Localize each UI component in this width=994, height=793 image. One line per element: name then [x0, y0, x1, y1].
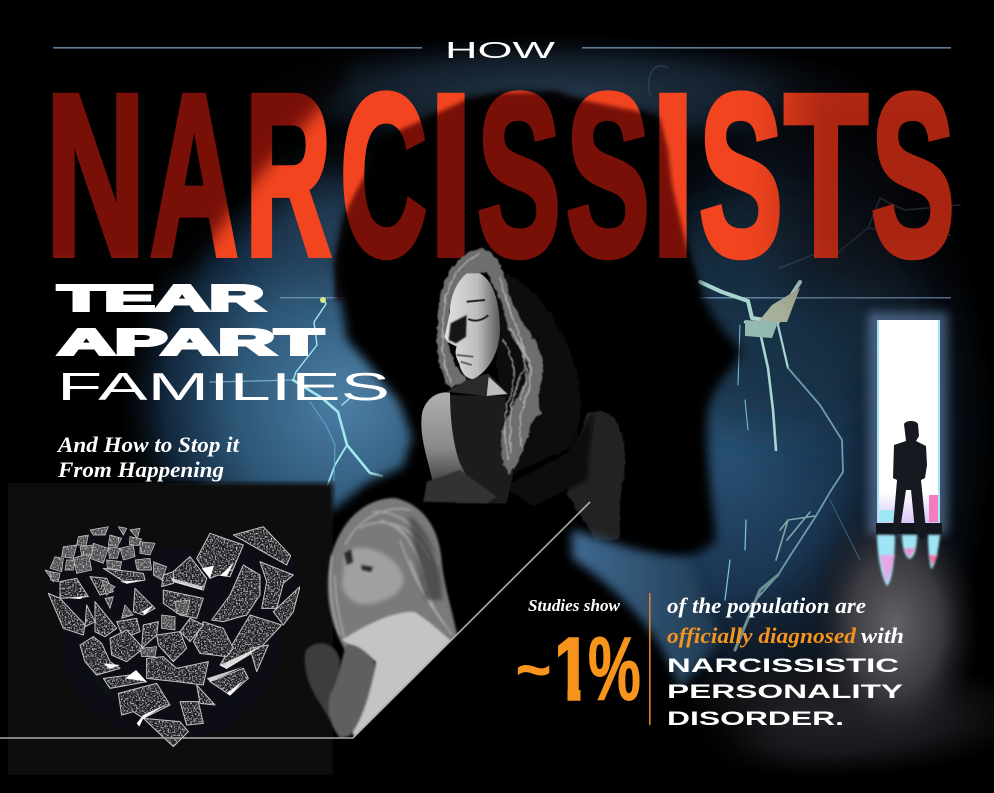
- heading: TEAR APART FAMILIES: APART: [58, 322, 323, 362]
- heading: TEAR APART FAMILIES: [57, 278, 390, 409]
- heart base: [47, 527, 300, 747]
- bottom edge of wall: [690, 776, 994, 793]
- statement text: NARCISSISTIC: [667, 655, 899, 677]
- photo: child: [305, 498, 460, 738]
- panel: title word NARCISSISTS: [46, 46, 955, 304]
- dark top: [443, 394, 513, 503]
- statement text: [667, 593, 904, 730]
- neck: [447, 373, 508, 396]
- floor reflections: [877, 535, 940, 586]
- bright glints: [69, 562, 263, 727]
- statistic: studies show about 1%: 1: [552, 619, 592, 720]
- head silhouette shadow: [0, 92, 742, 793]
- dark back hair: [487, 267, 581, 473]
- hair strands: [443, 253, 531, 460]
- lit hair: [437, 247, 543, 475]
- statement text: DISORDER.: [667, 708, 844, 730]
- subtitle: And How to Stop it: [56, 432, 240, 457]
- forearm: [423, 470, 497, 503]
- statistic: studies show about 1%: %: [588, 620, 641, 720]
- door with silhouette man: [868, 312, 948, 586]
- photo: woman: [421, 247, 625, 540]
- face: [445, 273, 500, 379]
- child's hand: [305, 643, 340, 720]
- panel: title word NARCISSISTS: S: [566, 47, 650, 304]
- panel: title word NARCISSISTS: S: [477, 47, 561, 304]
- statement text: PERSONALITY: [667, 681, 903, 703]
- heading: TEAR APART FAMILIES: FAMILIES: [57, 366, 390, 409]
- statement text: officially diagnosed: [667, 623, 857, 648]
- orange divider: [649, 593, 651, 725]
- panel: title word NARCISSISTS: N: [46, 47, 145, 304]
- right arm: [567, 411, 625, 540]
- panel: title word NARCISSISTS: T: [784, 48, 868, 304]
- statement text: with: [861, 623, 904, 648]
- door of light: [877, 320, 940, 523]
- panel: title word NARCISSISTS: A: [150, 47, 238, 304]
- gray floor glow under the door: [810, 500, 980, 750]
- child's shirt: [342, 612, 460, 738]
- subtitle: [56, 432, 240, 482]
- panel: title word NARCISSISTS: S: [871, 47, 955, 304]
- panel: title word NARCISSISTS: C: [340, 47, 427, 303]
- heart of broken glass: [45, 527, 300, 747]
- panel: title word NARCISSISTS: R: [245, 46, 331, 303]
- heart panel background: [8, 483, 333, 775]
- man silhouette: [889, 421, 930, 540]
- small shards: [45, 527, 190, 657]
- cracks in the wall: [210, 66, 960, 650]
- title shade: darkens letters inside the head shadow and the corner: [0, 0, 994, 300]
- subtitle: From Happening: [57, 457, 224, 482]
- statistic: studies show about 1%: [516, 596, 641, 720]
- statistic: studies show about 1%: ~: [516, 636, 551, 703]
- statistic: studies show about 1%: Studies show: [528, 596, 621, 615]
- child's hair: [328, 498, 458, 660]
- blue band of light under the chin: [572, 530, 720, 690]
- bottom and diagonal rules: [0, 502, 590, 738]
- panel: title word NARCISSISTS: I: [651, 47, 695, 304]
- statement text: of the population are: [667, 593, 866, 618]
- heading: TEAR APART FAMILIES: TEAR: [58, 278, 264, 318]
- floor dark band: [876, 523, 942, 534]
- title: HOW with side rules: HOW: [445, 37, 556, 63]
- bare shoulder: [421, 392, 468, 485]
- panel: title word NARCISSISTS: S: [699, 47, 783, 304]
- panel: title word NARCISSISTS: I: [429, 47, 473, 304]
- child's face: [342, 548, 403, 604]
- thin rule behind the head: [280, 297, 951, 298]
- child's arm: [328, 645, 376, 738]
- soft shadow at lower middle: [570, 685, 750, 793]
